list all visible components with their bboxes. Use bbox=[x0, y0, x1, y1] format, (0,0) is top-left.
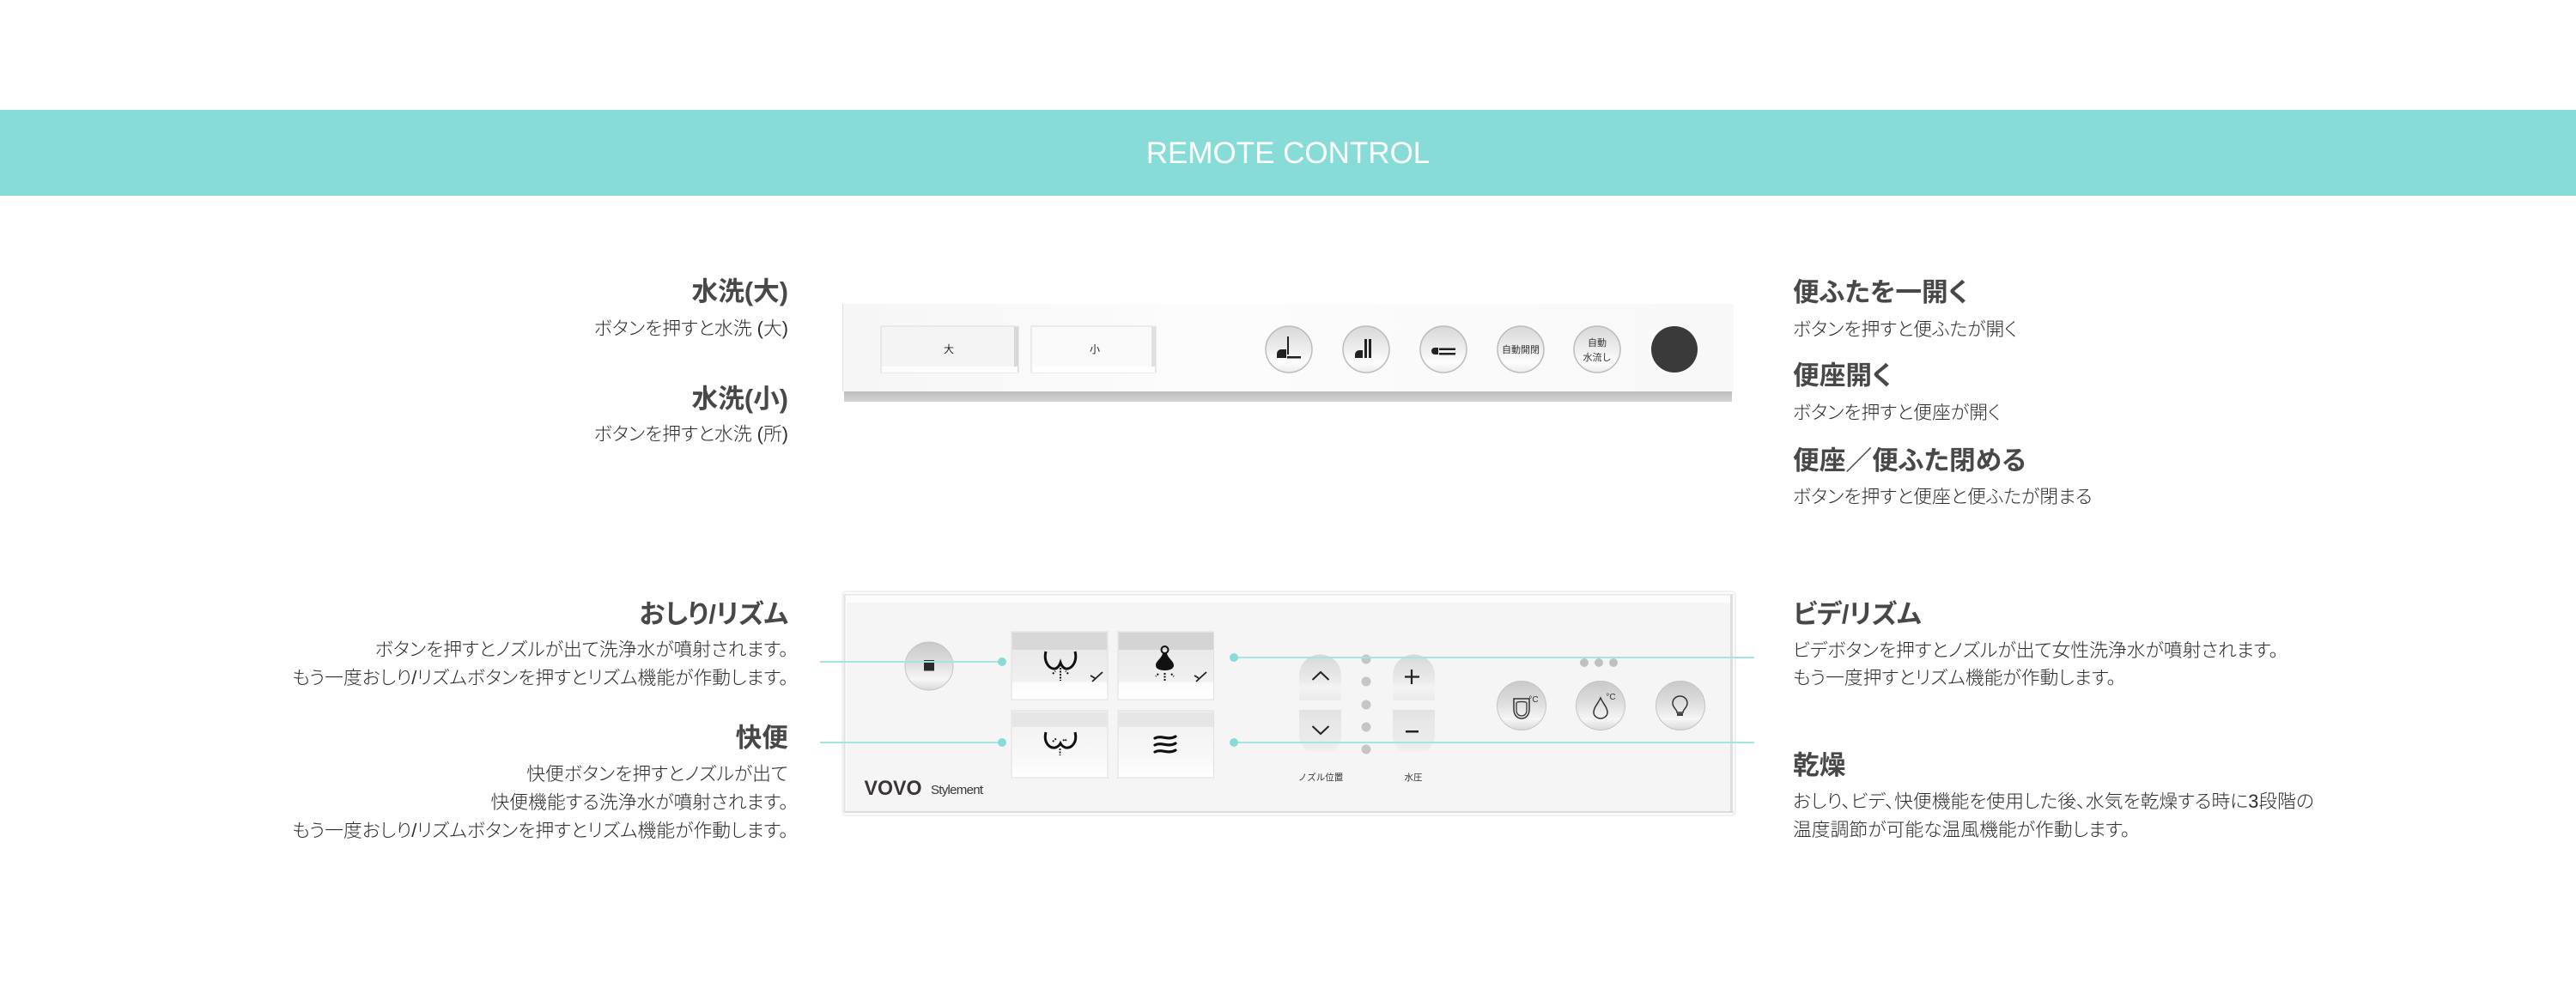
text block: close: ボタンを押すと便座と便ふたが閉まる bbox=[1793, 486, 2093, 507]
button: lid open bbox=[1266, 326, 1312, 373]
text block: dry: 乾燥 bbox=[1793, 750, 1845, 780]
button: pressure down bbox=[1393, 710, 1435, 755]
text block: lid open bbox=[1793, 277, 2017, 340]
button: nozzle down bbox=[1299, 710, 1341, 755]
text block: dry: おしり、ビデ、快便機能を使用した後、水気を乾燥する時に3段階の bbox=[1793, 791, 2314, 812]
text block: close: 便座／便ふた閉める bbox=[1793, 445, 2026, 476]
button: auto open close bbox=[1498, 326, 1544, 373]
button: kaiben bbox=[1012, 711, 1108, 778]
text block: bidet rhythm: ビデボタンを押すとノズルが出て女性洗浄水が噴射されます。 bbox=[1793, 639, 2278, 661]
text block: kaiben: 快便機能する洗浄水が噴射されます。 bbox=[490, 791, 788, 813]
title: REMOTE CONTROL bbox=[1146, 136, 1430, 170]
text block: oshiri rhythm: もう一度おしり/リズムボタンを押すとリズム機能が作動します。 bbox=[292, 667, 788, 688]
text block: flush small bbox=[594, 384, 788, 445]
text block: bidet rhythm bbox=[1793, 599, 2278, 688]
text block: flush large bbox=[594, 276, 788, 339]
text block: close bbox=[1793, 445, 2093, 507]
flush button: large: 大 bbox=[944, 343, 954, 355]
text block: flush large: 水洗(大) bbox=[691, 276, 788, 306]
button: bidet bbox=[1118, 632, 1214, 700]
button: water temperature bbox=[1577, 682, 1625, 730]
button: stop bbox=[905, 642, 953, 690]
button: pressure up bbox=[1393, 654, 1435, 700]
panel: lower remote bbox=[842, 591, 1735, 815]
text block: dry bbox=[1793, 750, 2314, 840]
text block: flush small: 水洗(小) bbox=[691, 384, 788, 414]
button: seat temperature: °C bbox=[1528, 695, 1539, 705]
label: water pressure: 水圧 bbox=[1405, 773, 1423, 783]
text block: seat open: ボタンを押すと便座が開く bbox=[1793, 402, 2001, 423]
indicator dots: temperature bbox=[1580, 658, 1618, 667]
button: auto flush: 水流し bbox=[1583, 352, 1611, 363]
button: light bbox=[1656, 682, 1705, 730]
text block: bidet rhythm: ビデ/リズム bbox=[1793, 599, 1922, 629]
flush button: large bbox=[881, 326, 1018, 373]
text block: oshiri rhythm bbox=[292, 599, 788, 688]
button: oshiri bbox=[1012, 632, 1108, 700]
text block: dry: 温度調節が可能な温風機能が作動します。 bbox=[1793, 819, 2130, 840]
button: nozzle up bbox=[1299, 654, 1341, 700]
button: auto flush: 自動 bbox=[1588, 336, 1607, 348]
text block: flush large: ボタンを押すと水洗 (大) bbox=[594, 318, 788, 339]
text block: oshiri rhythm: ボタンを押すとノズルが出て洗浄水が噴射されます。 bbox=[375, 639, 788, 660]
logo: VOVO: VOVO bbox=[864, 777, 922, 800]
button: seat temperature bbox=[1498, 682, 1546, 730]
sensor: dark circle bbox=[1651, 326, 1698, 373]
text block: lid open: 便ふたを一開く bbox=[1793, 277, 1968, 307]
button: seat open bbox=[1343, 326, 1389, 373]
button: auto flush bbox=[1574, 326, 1620, 373]
flush button: small bbox=[1031, 326, 1156, 373]
text block: lid open: ボタンを押すと便ふたが開く bbox=[1793, 318, 2017, 340]
text block: flush small: ボタンを押すと水洗 (所) bbox=[594, 423, 788, 445]
header band bbox=[0, 110, 2576, 196]
text block: seat open: 便座開く bbox=[1793, 361, 1892, 391]
button: auto open close: 自動開閉 bbox=[1502, 343, 1540, 355]
logo: Stylement: Stylement bbox=[931, 783, 984, 797]
text block: kaiben: 快便 bbox=[736, 723, 788, 753]
text block: seat open bbox=[1793, 361, 2001, 423]
button: close bbox=[1420, 326, 1467, 373]
indicator dots: nozzle bbox=[1362, 654, 1370, 754]
text block: kaiben: 快便ボタンを押すとノズルが出て bbox=[526, 763, 788, 785]
text block: bidet rhythm: もう一度押すとリズム機能が作動します。 bbox=[1793, 667, 2116, 688]
button: dry bbox=[1118, 711, 1214, 778]
flush button: small: 小 bbox=[1090, 343, 1100, 355]
text block: kaiben: もう一度おしり/リズムボタンを押すとリズム機能が作動します。 bbox=[292, 820, 788, 841]
text block: oshiri rhythm: おしり/リズム bbox=[639, 599, 788, 629]
text block: kaiben bbox=[292, 723, 788, 841]
label: nozzle position: ノズル位置 bbox=[1298, 772, 1344, 783]
button: water temperature: °C bbox=[1606, 693, 1616, 702]
leader lines bbox=[820, 653, 1754, 747]
panel: upper remote bbox=[842, 304, 1734, 402]
